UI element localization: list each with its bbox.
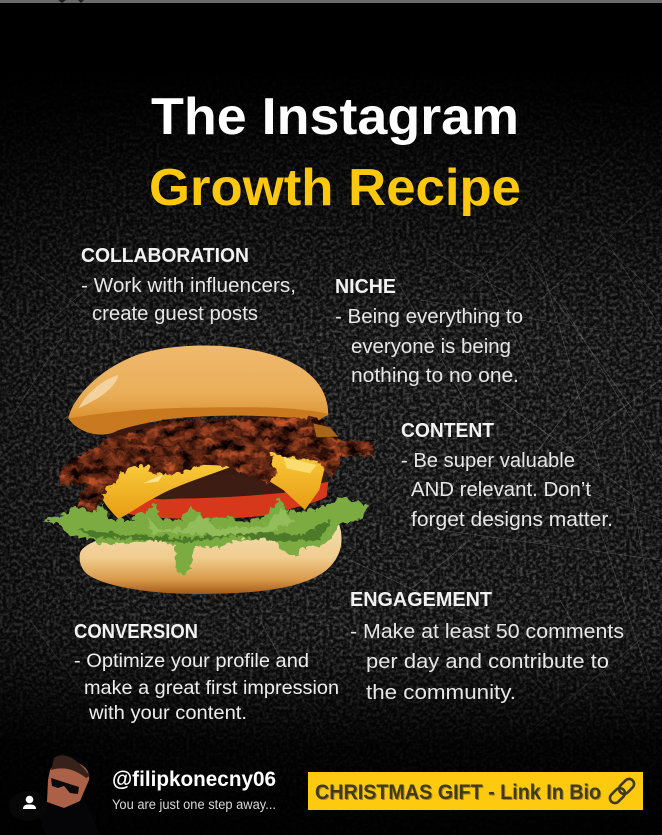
cheese	[100, 463, 233, 519]
text block: niche: everyone is being	[351, 335, 511, 358]
text block: engagement: the community.	[366, 681, 516, 704]
bun highlight	[78, 375, 118, 408]
text block: collaboration: COLLABORATION	[81, 244, 249, 267]
text block: engagement: - Make at least 50 comments	[350, 620, 624, 643]
title	[149, 88, 521, 217]
text block: collaboration: - Work with influencers,	[81, 274, 296, 297]
text block: niche: NICHE	[335, 275, 396, 298]
top strip of previous post	[0, 0, 662, 3]
handle and tagline: You are just one step away...	[112, 797, 276, 812]
call-to-action banner: CHRISTMAS GIFT - Link In Bio	[315, 780, 601, 804]
bacon highlight	[313, 423, 338, 437]
text block: niche: nothing to no one.	[351, 364, 519, 387]
text block: niche: - Being everything to	[335, 305, 523, 328]
text block: content: forget designs matter.	[411, 508, 613, 531]
title: Growth Recipe	[149, 159, 521, 217]
sunglasses	[51, 778, 79, 794]
text block: collaboration: create guest posts	[92, 302, 258, 325]
icon: user badge	[9, 791, 47, 821]
text block: conversion: make a great first impression	[84, 677, 339, 699]
text block: niche	[335, 275, 523, 387]
bottom bun	[80, 522, 342, 594]
title: The Instagram	[151, 88, 519, 146]
icon: burger illustration	[42, 346, 371, 594]
text block: engagement: per day and contribute to	[366, 650, 609, 673]
call-to-action banner: CHRISTMAS GIFT - Link In Bio	[316, 781, 602, 805]
bacon	[57, 415, 371, 525]
patty	[157, 475, 285, 499]
avatar: profile photo	[38, 753, 100, 835]
text block: content: AND relevant. Don’t	[411, 478, 591, 501]
text block: content: - Be super valuable	[401, 449, 575, 472]
top bun	[68, 346, 328, 434]
text block: engagement	[350, 588, 624, 704]
text block: engagement: ENGAGEMENT	[350, 588, 492, 611]
text block: content	[401, 419, 613, 531]
text block: conversion	[74, 620, 339, 724]
handle and tagline: @filipkonecny06	[112, 768, 276, 791]
text block: collaboration	[81, 244, 296, 325]
bun underside	[68, 407, 328, 435]
text block: conversion: - Optimize your profile and	[74, 650, 309, 672]
lettuce	[42, 495, 367, 573]
call-to-action banner	[308, 772, 643, 810]
tomato	[100, 482, 328, 519]
dark filling behind layers	[97, 412, 330, 513]
text block: conversion: with your content.	[88, 702, 247, 724]
text block: conversion: CONVERSION	[74, 620, 198, 643]
text block: content: CONTENT	[401, 419, 494, 442]
icon: chain link	[608, 777, 636, 805]
handle and tagline	[112, 768, 276, 812]
